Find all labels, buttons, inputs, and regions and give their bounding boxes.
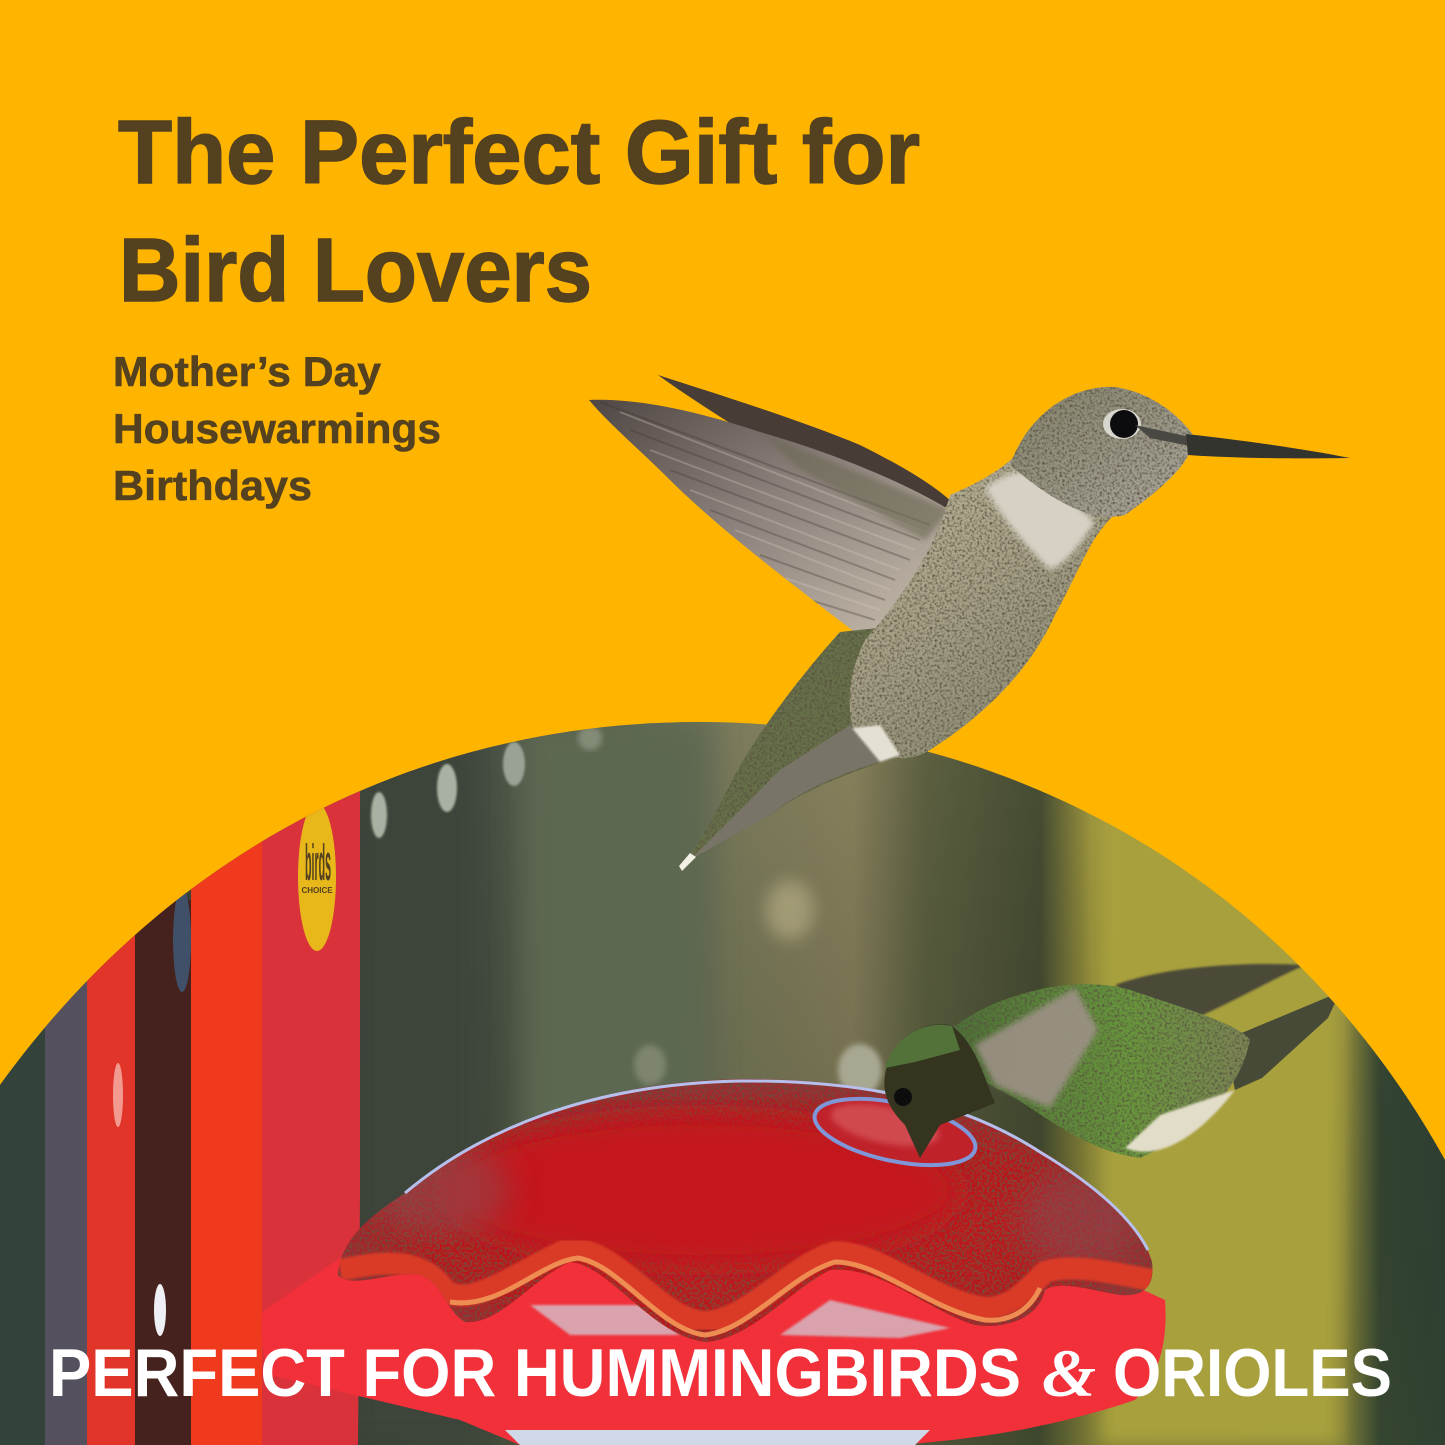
yellow logo badge: CHOICE [301, 886, 333, 895]
occasions list [113, 348, 441, 509]
front wing [589, 400, 950, 640]
throat [985, 471, 1095, 570]
feeding port [812, 1096, 978, 1168]
caption banner: ORIOLES [1113, 1335, 1392, 1411]
hummingbird in flight [589, 375, 1350, 871]
occasions list: Birthdays [113, 462, 312, 509]
red mounting post with logo: birds [305, 834, 331, 891]
body [850, 440, 1120, 758]
left window strip [0, 888, 191, 1445]
photo panel: feeder scene [0, 700, 1445, 1445]
beak [1186, 434, 1350, 458]
belly patch [852, 725, 900, 762]
blurred garden background [0, 700, 1445, 1445]
eye [1110, 410, 1138, 438]
white tail tip [679, 853, 696, 871]
red feeder base [261, 1258, 1166, 1445]
occasions list: Mother’s Day [113, 348, 382, 395]
title [118, 103, 920, 321]
caption banner: PERFECT FOR HUMMINGBIRDS [49, 1335, 1021, 1411]
red glass feeder dome [338, 1079, 1153, 1342]
glass jar neck [505, 1300, 950, 1445]
tail and lower body [680, 610, 1050, 870]
eye stripe [1135, 425, 1195, 446]
head [1010, 387, 1195, 517]
yellow logo badge [298, 803, 336, 951]
caption banner: & [1042, 1335, 1096, 1411]
title: The Perfect Gift for [118, 103, 920, 203]
red mounting post with logo [191, 790, 360, 1445]
white eye ring [1103, 409, 1141, 439]
occasions list: Housewarmings [113, 405, 441, 452]
hummingbird at feeder [884, 964, 1340, 1158]
title: Bird Lovers [119, 221, 592, 321]
rear wing [658, 375, 955, 520]
